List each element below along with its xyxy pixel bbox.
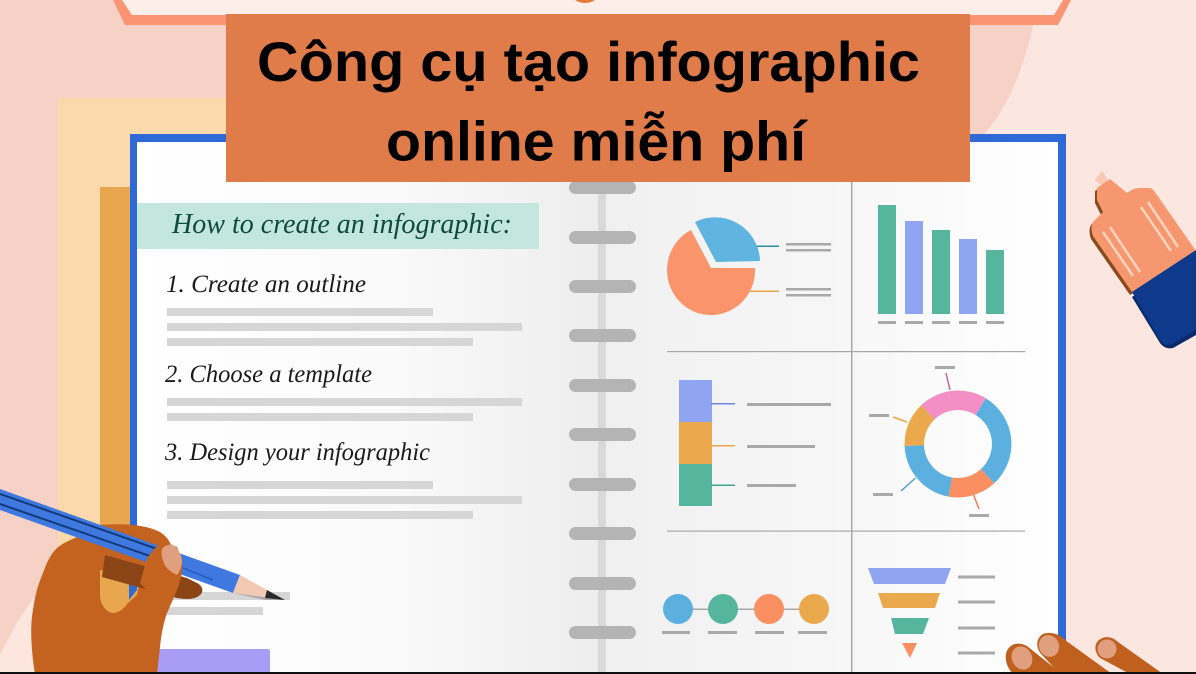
icon: right hand fingers (1006, 632, 1163, 674)
step 3: 3. Design your infographic (164, 439, 430, 466)
icon: marker (1090, 171, 1196, 348)
stacked bar (679, 380, 831, 506)
hand gap (100, 570, 141, 613)
fingernail (162, 545, 182, 575)
title line 2: online miễn phí (386, 110, 808, 172)
step 1: 1. Create an outline (166, 271, 366, 298)
purple block (150, 649, 270, 674)
title banner (226, 14, 970, 182)
notebook (130, 134, 1066, 674)
bottom edge (0, 672, 1196, 674)
step 1 (166, 271, 522, 346)
finger over pencil (140, 545, 182, 613)
hand (31, 524, 182, 674)
title line 1: Công cụ tạo infographic (257, 30, 920, 93)
heading text: How to create an infographic: (171, 209, 512, 240)
step 2 (165, 361, 522, 421)
bar chart (878, 205, 1004, 324)
left page content (137, 203, 539, 674)
pie chart (667, 217, 831, 315)
circle timeline (662, 594, 829, 634)
top frame (113, 0, 1071, 25)
blue strip through gap (129, 575, 137, 600)
step 3 (164, 439, 522, 519)
orange paper (100, 187, 160, 674)
step 2: 2. Choose a template (165, 361, 372, 388)
yellow paper (58, 98, 258, 674)
pencil (0, 489, 285, 600)
partial lines (167, 592, 290, 615)
grid lines (667, 175, 1025, 674)
heading banner (137, 203, 539, 249)
icon: left hand with pencil (0, 489, 285, 674)
spiral rings (569, 181, 636, 639)
donut chart (869, 366, 1011, 517)
finger shadow (102, 555, 202, 599)
funnel chart (868, 568, 995, 658)
